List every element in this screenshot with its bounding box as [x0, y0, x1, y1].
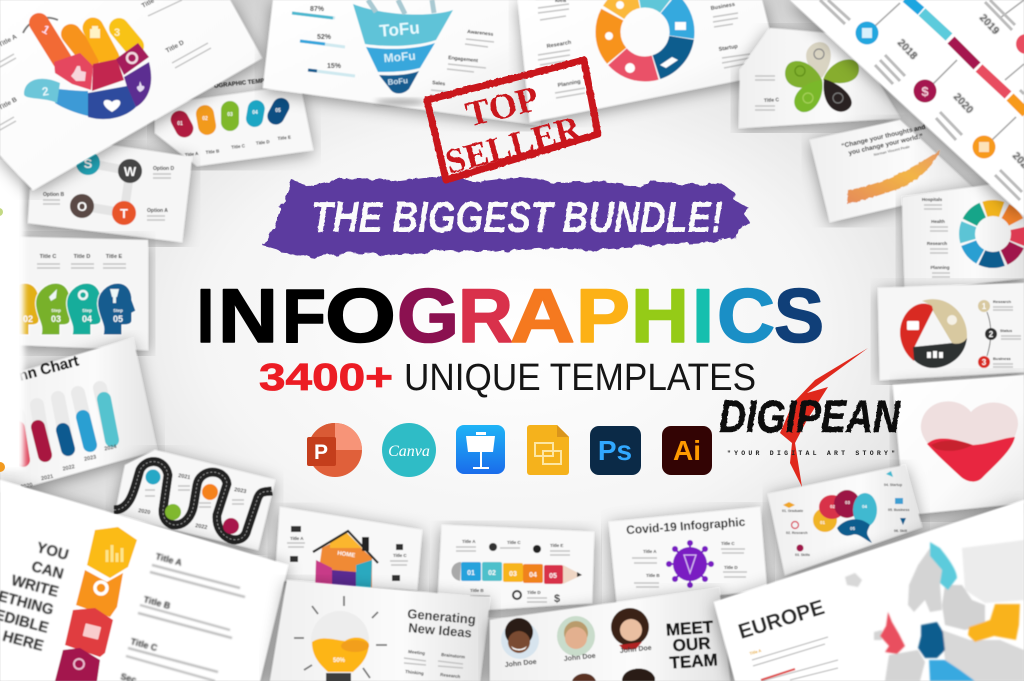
digipean logo: DIGIPEAN [719, 391, 901, 442]
panel: timeline [790, 0, 1024, 216]
icon: brain [813, 490, 877, 543]
covid labels: Title A [643, 549, 657, 554]
icon: brain: 04 [862, 504, 868, 509]
progress bars: 15% [327, 63, 342, 70]
pencil labels: Title E [550, 543, 563, 548]
icon: pill 04: 04 [252, 110, 258, 116]
road labels: 2020 [138, 508, 151, 516]
funnel labels [430, 29, 494, 98]
donut labels: Planning [557, 79, 581, 89]
icon: W [118, 159, 142, 183]
bar chart [18, 388, 112, 460]
panel: heart [893, 375, 1024, 515]
icon: brain: 03 [845, 500, 851, 505]
panel: meet our team [490, 588, 730, 681]
quote text: “Change your thoughts and [841, 124, 926, 150]
icon: brain: 01 [820, 520, 826, 525]
brain side icons: 06. Skill [894, 529, 907, 533]
brain side icons: 03. Skills [795, 553, 810, 557]
stamp: top seller: SELLER [441, 108, 585, 182]
icon: head 03 [36, 283, 74, 335]
donut labels [538, 0, 750, 98]
pencil chart: 04 [529, 572, 537, 579]
circle legend: Business [993, 356, 1012, 361]
icon: W: W [124, 164, 137, 179]
funnel chart: ToFu [379, 18, 420, 41]
hand labels [0, 0, 211, 130]
home labels: Title C [393, 553, 407, 558]
panel: funnel [263, 0, 540, 125]
timeline node 2019 [914, 80, 936, 102]
icon: head 02 [5, 283, 43, 335]
icon: keynote [456, 425, 505, 474]
timeline node 2021 [1016, 34, 1024, 54]
slogan: HERE [1, 628, 45, 655]
quote text: you change your world.” [848, 133, 924, 157]
icon: purple brush banner [263, 176, 750, 257]
team names: John Doe [619, 645, 652, 655]
slogan [0, 539, 70, 655]
head labels: 03 [51, 314, 61, 324]
slogan: YOU [35, 539, 70, 564]
panel: pencil [437, 525, 594, 613]
europe map shapes [845, 540, 1024, 681]
icon: head 05 [98, 283, 136, 335]
title: infographics: I [197, 274, 214, 359]
donut labels: Business [710, 2, 735, 12]
brush stroke [847, 150, 940, 204]
panel: road timeline [114, 450, 275, 550]
funnel labels: Awareness [467, 29, 494, 38]
digipean logo [719, 391, 901, 457]
panel: circle triangle [878, 283, 1024, 380]
funnel chart: BoFu [387, 76, 408, 87]
hand labels: Title D [165, 39, 186, 55]
pill labels: Title A [185, 151, 199, 158]
chart years: 2024 [104, 444, 118, 452]
circle legend [978, 299, 1021, 368]
icon: pill 05: 05 [275, 108, 281, 114]
progress bars: 87% [310, 6, 325, 13]
pencil chart [451, 562, 582, 584]
panel: quote [810, 120, 975, 222]
road [114, 462, 272, 540]
icon: S [76, 151, 100, 175]
head labels: 04 [82, 314, 92, 324]
slogan: WRITE [9, 572, 60, 601]
title: infographics: C [717, 274, 775, 359]
brain side icons: 05. Business [888, 508, 909, 512]
panel: SWOT [28, 145, 192, 242]
icon: canva [382, 423, 436, 477]
panel: petals [739, 28, 900, 128]
pencil labels [456, 539, 570, 605]
pencil chart: 02 [488, 570, 496, 577]
title: infographics: S [774, 274, 824, 359]
covid labels: Title D [724, 565, 738, 570]
banner text: THE BIGGEST BUNDLE! [311, 193, 723, 242]
icon: hand: 2 [41, 84, 50, 99]
step titles: Title B [142, 594, 172, 611]
donut icons [605, 1, 686, 73]
team names: John Doe [563, 653, 596, 663]
title: infographics: F [282, 274, 326, 359]
digipean logo: "YOUR DIGITAL ART STORY" [727, 450, 895, 457]
title: infographics: I [692, 274, 714, 359]
icon: pill 03 [221, 101, 239, 131]
icon: illustrator [662, 426, 712, 475]
wheel labels: Research [927, 241, 947, 246]
icon: photoshop [590, 426, 641, 475]
circle legend: 3 [982, 358, 987, 367]
panel: covid [609, 507, 767, 605]
panel: pill timeline: OGRAPHIC TEMPL [214, 78, 269, 90]
title: infographics: P [576, 274, 630, 359]
icon: pill 03: 03 [227, 112, 233, 118]
title: infographics: R [458, 274, 513, 359]
road markers [146, 470, 239, 534]
pencil chart: 03 [509, 571, 517, 578]
timeline text blocks [820, 0, 1024, 200]
head titles: Title C [40, 254, 56, 260]
step titles: Title C [129, 636, 159, 653]
team names: John Doe [504, 659, 537, 669]
pencil labels: Title B [470, 588, 484, 593]
covid labels: Title B [646, 573, 660, 578]
wheel labels: Planning [930, 265, 950, 270]
icon: pill 01: 01 [177, 121, 183, 127]
team heading [665, 617, 718, 673]
SWOT labels [43, 166, 174, 220]
circle legend: 2 [989, 330, 994, 339]
panel: brain [768, 465, 922, 575]
stamp: top seller: TOP [462, 78, 543, 135]
stamp: top seller [427, 60, 598, 182]
icon: powerpoint [307, 423, 362, 477]
road labels: 2022 [195, 523, 208, 531]
petal labels [755, 76, 780, 110]
panel: home puzzle [275, 507, 422, 590]
donut labels: Research [546, 40, 572, 50]
panel: hexagon steps [0, 480, 288, 681]
icon: pill 04 [245, 99, 266, 128]
subtitle: UNIQUE TEMPLATES [404, 357, 756, 399]
home labels: Title A [290, 536, 304, 541]
icon: hand: 1 [40, 22, 53, 38]
icon: hand [23, 18, 151, 119]
pencil labels: $ [554, 593, 560, 605]
team heading: MEET [665, 617, 714, 640]
chart years [16, 444, 122, 491]
timeline node 2019: $ [921, 84, 929, 99]
step titles: Title A [154, 551, 184, 568]
bulb labels: Brainstorm [441, 652, 465, 660]
icon: hand: 3 [114, 27, 120, 39]
icon: light bulb: 50% [333, 658, 346, 664]
road labels: 2021 [178, 473, 191, 481]
timeline node 2018 [856, 22, 878, 44]
icon: photoshop: Ps [598, 435, 632, 466]
bulb heading: Generating [407, 606, 476, 627]
circle legend: Status [1000, 328, 1013, 333]
icon: red lightning [780, 348, 868, 487]
title: infographics: N [218, 274, 278, 359]
timeline years: 2018 [895, 37, 920, 62]
pill labels: Title C [231, 143, 246, 150]
SWOT labels: Option A [147, 208, 168, 214]
portrait 3 [611, 608, 649, 650]
head titles: Title E [106, 254, 123, 260]
panel: column chart [0, 338, 157, 492]
panel: donut cycle [518, 0, 780, 122]
brain side icons: 01. Graduate [782, 509, 803, 513]
panel: head profiles [5, 237, 148, 350]
icon: light bulb [294, 596, 387, 681]
covid labels [632, 541, 747, 587]
europe heading: EUROPE [736, 596, 827, 644]
funnel chart [353, 0, 453, 105]
panel: europe map [714, 500, 1024, 681]
portrait 1 [501, 618, 539, 659]
home labels [287, 526, 408, 581]
icon: head 04 [67, 283, 105, 335]
title: infographics [197, 274, 824, 359]
timeline node 2020 [972, 136, 996, 158]
pencil labels: Title A [462, 539, 476, 544]
circle legend: 1 [982, 302, 987, 311]
head labels: Step [82, 308, 92, 313]
head labels: 02 [23, 314, 33, 324]
road labels [138, 473, 247, 531]
title: infographics: H [631, 274, 689, 359]
icon: pill 02 [195, 104, 217, 136]
wheel chart [967, 208, 1019, 260]
subtitle [259, 357, 756, 399]
head labels: Step [113, 308, 123, 313]
icon: illustrator: Ai [673, 435, 701, 466]
icon: house [313, 531, 378, 590]
title: infographics: G [397, 274, 459, 359]
panel: pill timeline [155, 78, 313, 166]
icon: canva: Canva [388, 443, 430, 460]
pencil labels: Title D [527, 590, 541, 595]
bulb labels: Thinking [405, 669, 424, 676]
brain side icons: 02. Research [786, 531, 808, 535]
timeline years: 2019 [977, 12, 1002, 37]
SWOT labels: Option D [153, 166, 174, 172]
donut chart [608, 0, 682, 69]
bulb heading: New Ideas [408, 620, 472, 641]
icon: brain: 02 [830, 504, 836, 509]
covid title: Covid-19 Infographic [626, 515, 746, 537]
icon: T [112, 201, 136, 225]
head labels: Step [51, 308, 61, 313]
bulb labels: Research [440, 672, 461, 679]
brain side icons: 04. Startup [884, 483, 902, 487]
team heading: TEAM [669, 650, 718, 673]
wheel labels: Health [931, 219, 945, 224]
bulb heading [407, 606, 476, 641]
SWOT labels: Option B [43, 192, 64, 198]
panel: hand puzzle [0, 0, 262, 190]
panel: hospital wheel [902, 180, 1024, 292]
head titles [37, 254, 126, 268]
icon: pill 01 [167, 107, 197, 141]
subtitle: 3400+ [259, 357, 393, 399]
pill labels: Title D [256, 139, 271, 146]
title: infographics: A [510, 274, 575, 359]
europe text [749, 637, 838, 681]
circle legend: Research [993, 299, 1012, 304]
timeline road [906, 0, 1024, 113]
icon: pill 02: 02 [202, 116, 208, 122]
pencil chart: 01 [467, 570, 475, 577]
donut labels: Startup [718, 44, 739, 53]
wheel labels: Hospitals [922, 197, 943, 202]
timeline years: 2020 [951, 91, 976, 116]
covid labels: Title C [721, 541, 735, 546]
icon: T: T [120, 206, 128, 221]
icon: petal flower [785, 42, 859, 112]
timeline connectors [875, 0, 1024, 140]
quote text: Norman Vincent Peale [873, 145, 910, 157]
bulb labels: Meeting [408, 649, 426, 656]
funnel labels: Engagement [448, 55, 479, 64]
funnel chart: MoFu [383, 49, 416, 65]
europe text: Title A [749, 648, 762, 656]
icon: S: S [84, 156, 93, 171]
head labels: 05 [113, 314, 123, 324]
pill labels: Title E [277, 135, 291, 141]
pill labels [184, 135, 292, 158]
panel: blurred left slide [0, 157, 24, 472]
petal labels: Title C [764, 97, 780, 104]
icon: O [70, 194, 94, 218]
wheel labels [922, 197, 950, 277]
slogan: CAN [30, 558, 65, 583]
progress bars [292, 6, 355, 76]
team names [504, 645, 652, 669]
road labels: 2023 [234, 487, 247, 495]
icon: virus [666, 540, 714, 588]
panel: bulb ideas [270, 580, 490, 681]
pencil labels: Title C [507, 540, 521, 545]
lower portraits [572, 669, 655, 681]
icon: O: O [77, 199, 87, 214]
icon: google slides [527, 425, 569, 475]
icon: brain: 05 [850, 526, 856, 531]
brain side icons [782, 471, 909, 557]
step titles [119, 551, 245, 681]
chart title: nn Chart [17, 352, 81, 385]
team heading: OUR [672, 634, 711, 655]
pill labels: Title B [205, 148, 220, 155]
icon: pill 05 [264, 95, 293, 128]
chart years: 2022 [62, 464, 75, 473]
timeline years [895, 12, 1024, 175]
icon: powerpoint: P [314, 441, 328, 464]
funnel labels: Sales [432, 80, 446, 87]
chart years: 2023 [84, 454, 97, 463]
circle chart [900, 299, 967, 368]
chart years: 2020 [20, 482, 33, 491]
chart years: 2021 [41, 474, 54, 482]
progress bars: 52% [317, 34, 332, 41]
icon: heart [921, 401, 1018, 482]
portrait 2 [557, 616, 595, 656]
head labels [23, 308, 123, 324]
bulb labels [404, 649, 465, 679]
title: infographics: O [325, 274, 396, 359]
icon: hexagon arrows [55, 527, 137, 681]
icon: house: HOME [337, 551, 355, 559]
head titles: Title D [74, 254, 90, 260]
pencil chart: 05 [549, 573, 557, 580]
head symbols [49, 289, 119, 303]
